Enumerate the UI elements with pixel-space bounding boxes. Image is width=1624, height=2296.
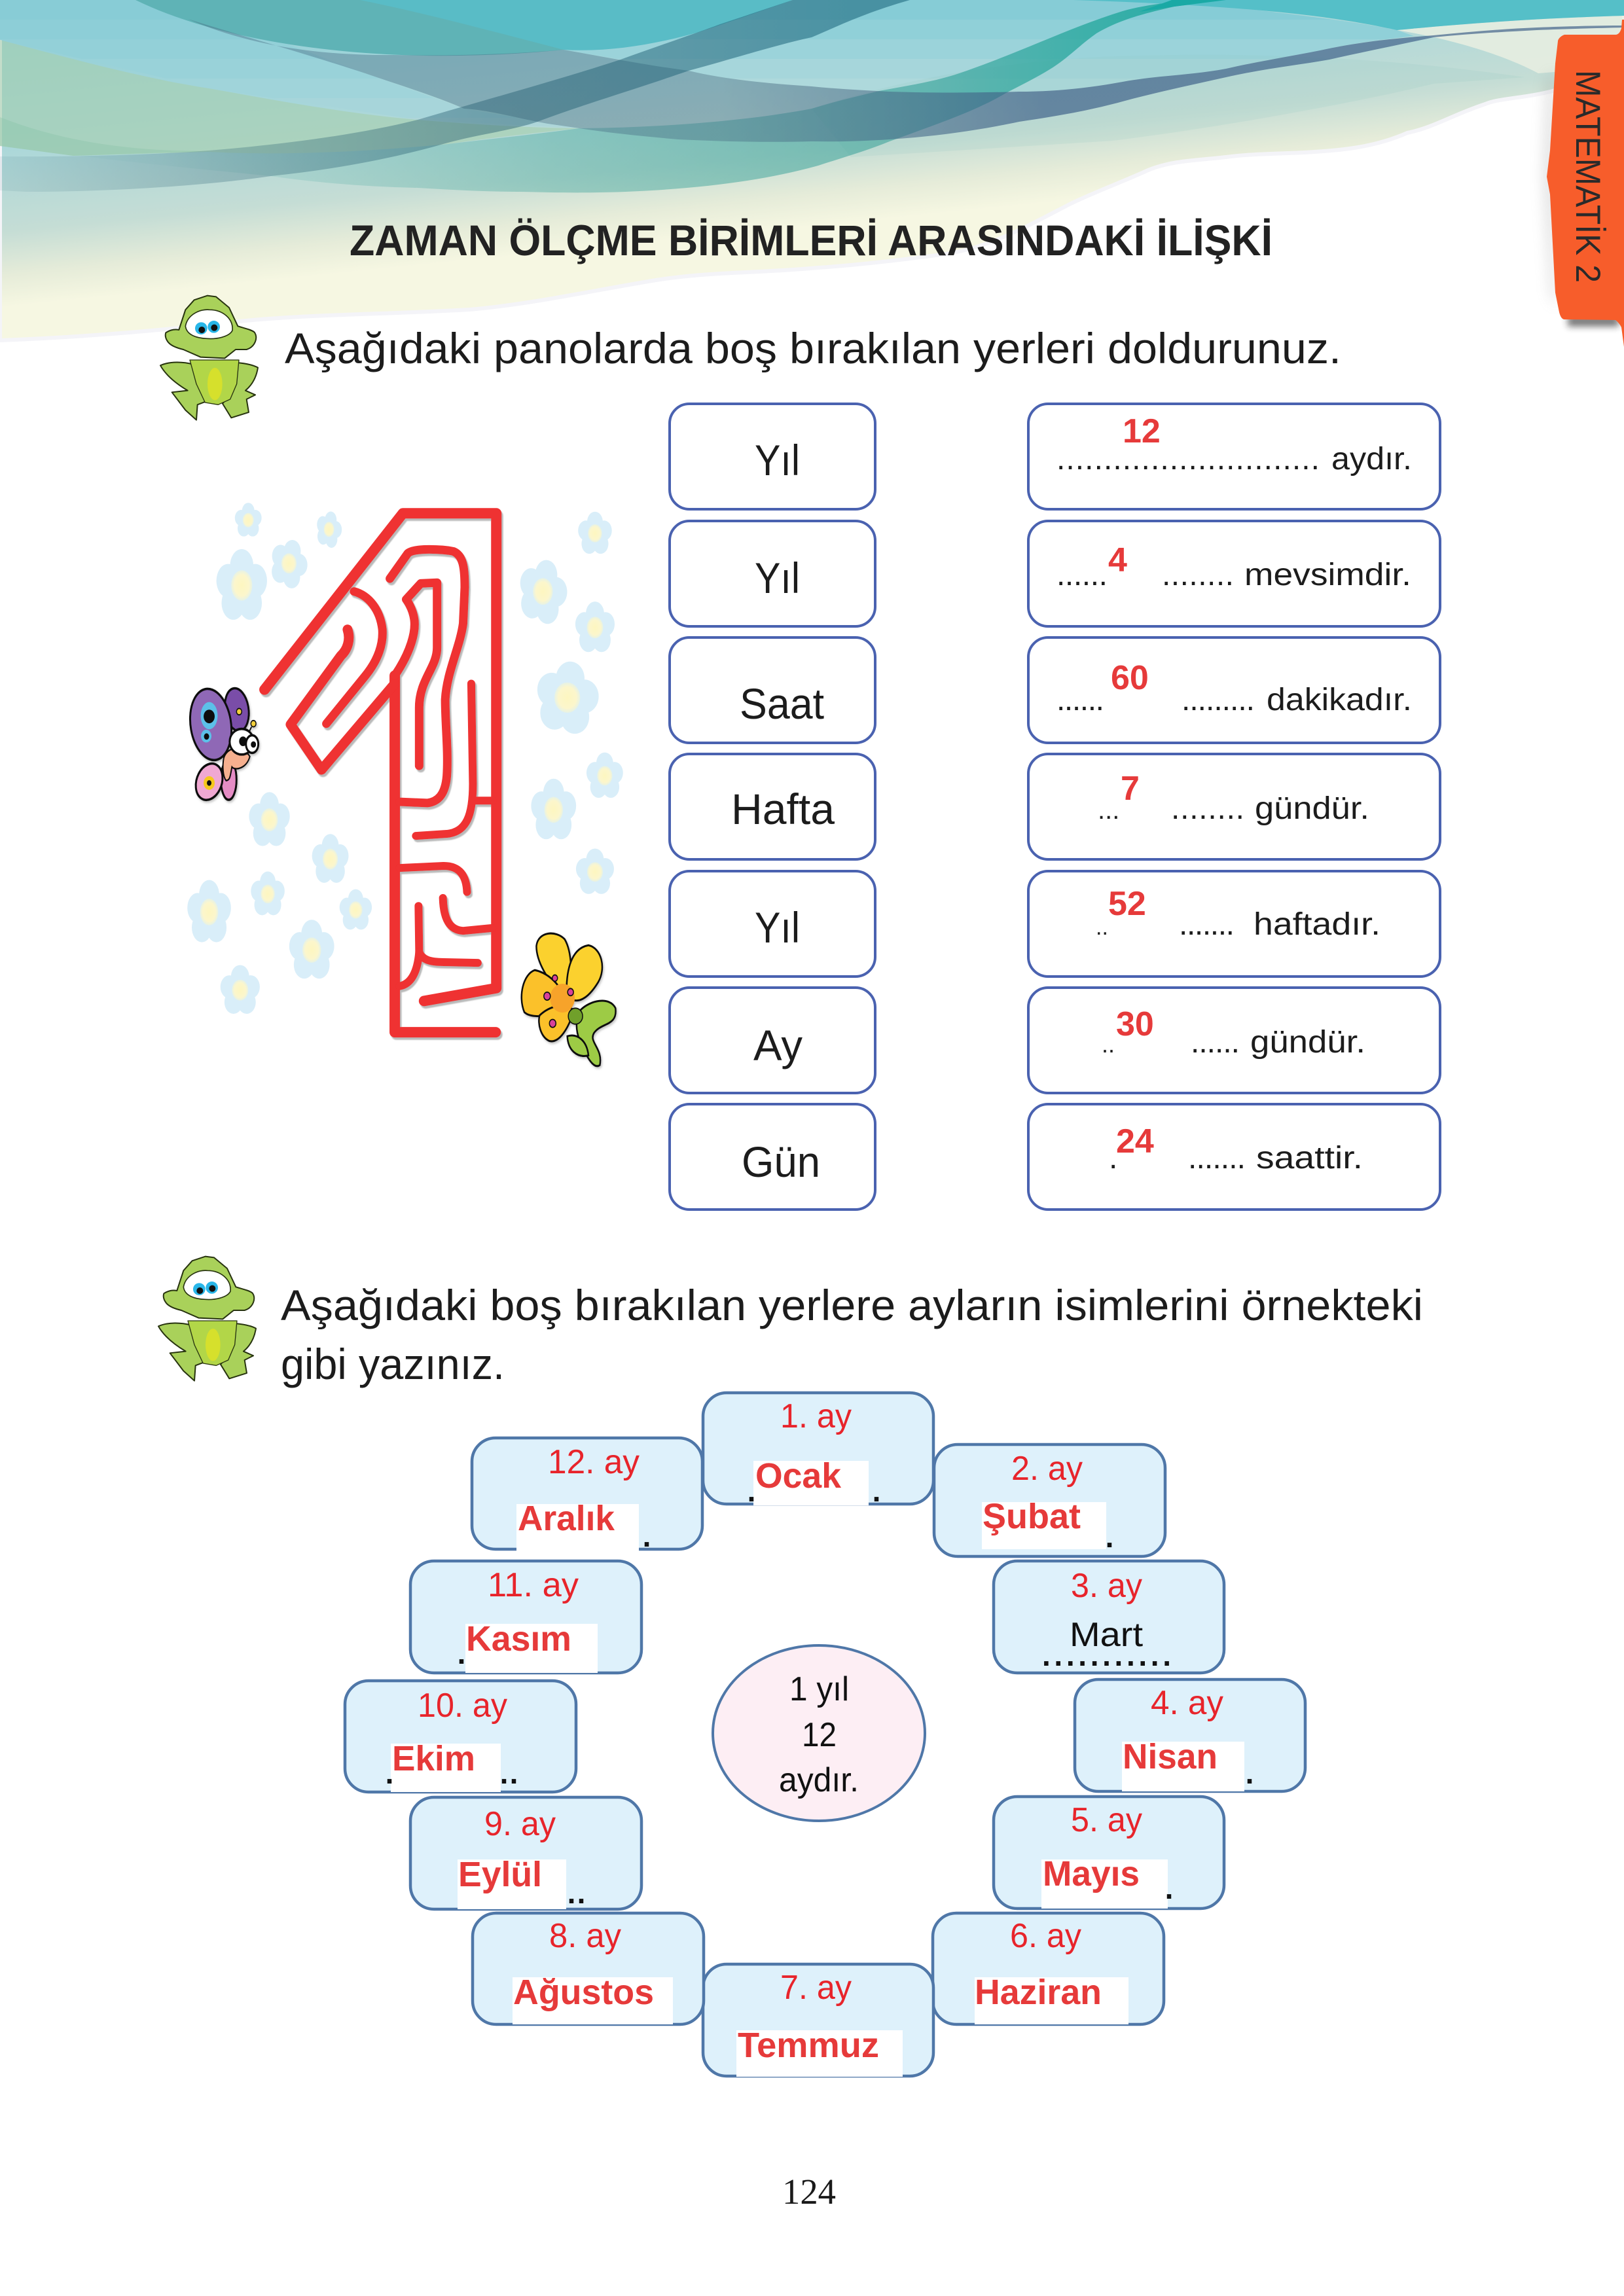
panel: answer boxes: ........ <box>1171 791 1244 826</box>
month 10: 10. ay <box>418 1687 507 1725</box>
month 11: 11. ay <box>488 1566 579 1604</box>
panel: answer boxes: mevsimdir. <box>1244 558 1411 592</box>
month 5: 5. ay <box>1071 1801 1142 1839</box>
number one maze <box>264 513 496 1032</box>
butterfly <box>185 684 259 806</box>
month 4: 4. ay <box>1151 1684 1223 1722</box>
month 3: 3. ay <box>1071 1567 1142 1605</box>
month 5 <box>994 1797 1224 1909</box>
background waves <box>0 0 1624 340</box>
panel: answer boxes: ....... <box>1188 1141 1246 1175</box>
month 1: 1. ay <box>780 1397 852 1435</box>
panel: answer boxes: ... <box>1098 796 1119 825</box>
pale flowers <box>187 503 623 1014</box>
month 10: Ekim <box>392 1739 475 1778</box>
panel: unit boxes: Hafta <box>731 785 835 833</box>
instruction 2: Aşağıdaki boş bırakılan yerlere ayların isimlerini örnekteki <box>281 1281 1423 1329</box>
panel: answer boxes: . <box>1109 1141 1117 1175</box>
month 7: 7. ay <box>780 1969 852 2007</box>
diagram: months of the year <box>345 1393 1305 2077</box>
panel: answer boxes: gündür. <box>1255 791 1369 826</box>
center ellipse: 1 yıl 12 aydır: aydır. <box>779 1761 859 1799</box>
illustration: maze number one with flowers <box>185 503 623 1066</box>
month 8 <box>473 1913 704 2024</box>
center ellipse: 1 yıl 12 aydır <box>713 1645 925 1821</box>
yellow flower <box>522 933 616 1066</box>
panel: answer boxes: ....... <box>1179 907 1235 942</box>
month 2: Şubat <box>983 1497 1081 1536</box>
page number: 124 <box>782 2172 836 2212</box>
month 5: . <box>1165 1871 1173 1905</box>
panel: answer boxes: ............................ <box>1056 442 1320 476</box>
panel: answer boxes: ...... <box>1191 1025 1240 1060</box>
panel: answer boxes: 24 <box>1116 1122 1154 1160</box>
month 3: ........... <box>1042 1638 1171 1672</box>
icon: frog 1 <box>160 296 258 420</box>
month 4: Nisan <box>1123 1737 1218 1776</box>
instruction 2: gibi yazınız. <box>281 1340 505 1388</box>
month 8: 8. ay <box>549 1917 621 1955</box>
month 9 <box>410 1797 641 1910</box>
month 9: . <box>577 1876 585 1910</box>
month 9: . <box>568 1876 575 1910</box>
month 11: . <box>458 1636 465 1670</box>
panel: unit boxes: Ay <box>753 1021 803 1069</box>
month 8: Ağustos <box>513 1973 654 2012</box>
month 6: Haziran <box>975 1973 1102 2012</box>
month 10: . <box>386 1756 393 1790</box>
panel: answer boxes: 7 <box>1121 770 1140 808</box>
center ellipse: 1 yıl 12 aydır: 12 <box>802 1716 837 1754</box>
month 7: Temmuz <box>738 2026 879 2065</box>
panel: answer boxes: ...... <box>1056 558 1108 592</box>
month 6: 6. ay <box>1010 1917 1081 1955</box>
month 2: . <box>1106 1520 1113 1554</box>
panel: answer boxes: ........ <box>1162 558 1234 592</box>
panel: answer boxes: 60 <box>1111 659 1149 697</box>
center ellipse: 1 yıl 12 aydır: 1 yıl <box>789 1670 849 1708</box>
panel: answer boxes: ......... <box>1182 683 1255 717</box>
month 12: 12. ay <box>548 1443 640 1481</box>
month 2: 2. ay <box>1011 1450 1083 1488</box>
panel: unit boxes: Yıl <box>755 436 800 484</box>
panel: answer boxes: 12 <box>1123 412 1161 450</box>
panel: answer boxes <box>1028 404 1440 1210</box>
month 10 <box>345 1681 576 1792</box>
month 9: 9. ay <box>484 1805 556 1843</box>
tab: MATEMATİK 2 <box>1543 20 1624 347</box>
icon: frog 2 <box>158 1257 256 1381</box>
panel: answer boxes: aydır. <box>1331 442 1412 476</box>
month 4: . <box>1246 1756 1254 1790</box>
panel: answer boxes: gündür. <box>1250 1025 1365 1060</box>
panel: unit boxes: Yıl <box>755 903 800 952</box>
month 12: Aralık <box>518 1499 615 1538</box>
month 11 <box>410 1561 641 1673</box>
month 12 <box>472 1438 702 1553</box>
month 3: Mart <box>1070 1616 1144 1654</box>
panel: answer boxes: 52 <box>1108 885 1146 923</box>
panel: answer boxes: ...... <box>1056 683 1104 717</box>
month 1 <box>703 1393 933 1508</box>
panel: answer boxes: .. <box>1102 1031 1115 1058</box>
month 12: . <box>643 1519 651 1553</box>
tab: MATEMATİK 2: MATEMATİK 2 <box>1568 70 1607 283</box>
panel: answer boxes: .. <box>1096 915 1108 940</box>
month 5: Mayıs <box>1043 1854 1140 1893</box>
month 7 <box>703 1964 933 2077</box>
month 9: Eylül <box>458 1855 542 1894</box>
panel: answer boxes: 4 <box>1108 541 1127 579</box>
panel: unit boxes: Yıl <box>755 554 800 602</box>
panel: unit boxes: Saat <box>740 679 824 728</box>
month 1: . <box>748 1474 755 1508</box>
month 1: Ocak <box>755 1456 842 1496</box>
month 6 <box>933 1913 1164 2024</box>
month 4 <box>1075 1679 1305 1791</box>
instruction 1: Aşağıdaki panolarda boş bırakılan yerleri doldurunuz. <box>285 324 1341 372</box>
instruction 2 <box>281 1281 1423 1388</box>
month 2 <box>934 1444 1165 1556</box>
panel: answer boxes: dakikadır. <box>1267 683 1412 717</box>
month 11: Kasım <box>466 1619 571 1659</box>
month 10: . <box>510 1756 518 1790</box>
panel: unit boxes: Gün <box>742 1138 820 1186</box>
panel: answer boxes: 30 <box>1116 1005 1154 1043</box>
panel: answer boxes: saattir. <box>1256 1141 1363 1175</box>
title: ZAMAN ÖLÇME BİRİMLERİ ARASINDAKİ İLİŞKİ <box>350 216 1272 264</box>
month 10: . <box>500 1756 508 1790</box>
panel: answer boxes: haftadır. <box>1254 907 1380 942</box>
panel: unit boxes <box>670 404 875 1210</box>
month 3 <box>994 1561 1224 1673</box>
month 1: . <box>873 1474 880 1508</box>
